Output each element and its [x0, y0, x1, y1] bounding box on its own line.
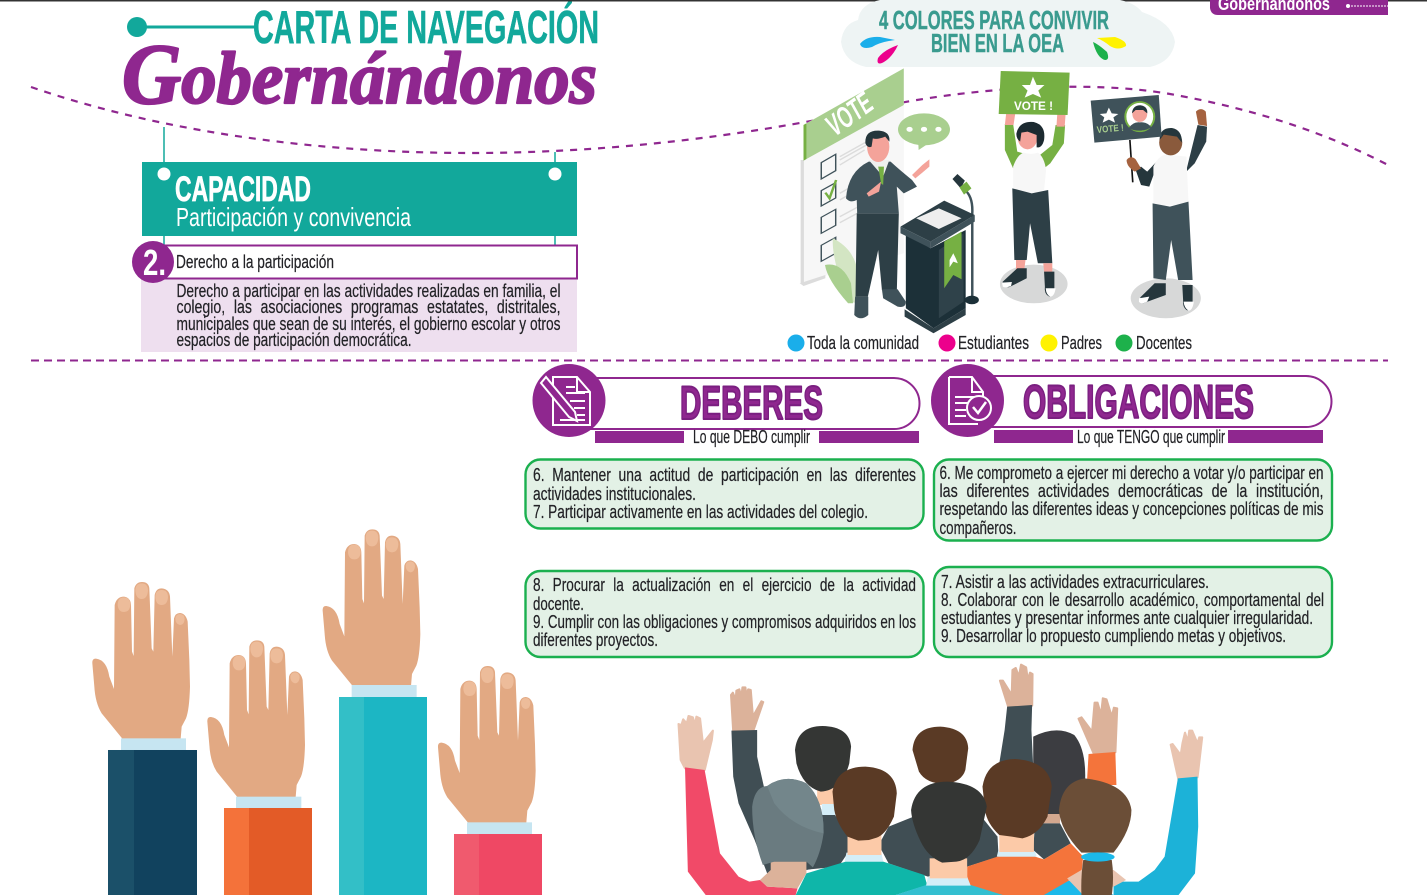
text box: deberes 8-9: 8. Procurar la actualización en el ejercicio de la actividad — [533, 575, 916, 595]
hand: navy sleeve — [92, 582, 197, 895]
title: Gobernándonos — [122, 26, 597, 122]
icon: document and pencil — [541, 377, 590, 425]
header: obligaciones: Lo que TENGO que cumplir — [1077, 427, 1225, 447]
text box: obligaciones 6: compañeros. — [940, 518, 1016, 538]
text box: deberes 6-7: 6. Mantener una actitud de participación en las diferentes — [533, 465, 916, 485]
text box: obligaciones 7-9: 7. Asistir a las actividades extracurriculares. — [941, 572, 1209, 592]
text box: deberes 6-7 — [526, 460, 924, 528]
panel: derecho a la participación: 2. — [143, 242, 166, 283]
icon: document and check — [949, 377, 991, 424]
legend — [788, 333, 1192, 353]
text box: obligaciones 6 — [934, 460, 1332, 540]
header: obligaciones: OBLIGACIONES — [1023, 375, 1254, 428]
legend: Docentes — [1136, 333, 1192, 353]
illustration: student with sign — [999, 71, 1070, 303]
text box: deberes 6-7: actividades institucionales. — [533, 484, 696, 504]
panel: capacidad: Participación y convivencia — [176, 202, 411, 232]
cloud heading: 4 colores: 4 COLORES PARA CONVIVIR — [879, 5, 1109, 35]
illustration: student with sign: VOTE ! — [1014, 99, 1053, 113]
text box: deberes 8-9: docente. — [533, 594, 584, 614]
cloud heading: 4 colores — [841, 0, 1175, 67]
illustration: raised hands — [92, 529, 542, 895]
panel: derecho a la participación: colegio, las asociaciones programas estatates, distritales, — [176, 297, 560, 317]
text box: obligaciones 6: las diferentes actividades democráticas de la institución, — [940, 481, 1324, 501]
text box: deberes 6-7: 7. Participar activamente en las actividades del colegio. — [533, 502, 868, 522]
header: obligaciones — [931, 364, 1332, 447]
illustration: candidate at podium — [799, 68, 979, 333]
illustration: crowd from behind — [679, 665, 1202, 895]
legend: Toda la comunidad — [807, 333, 919, 353]
illustration: candidate at podium: VOTE — [820, 86, 880, 143]
cloud heading: 4 colores: BIEN EN LA OEA — [931, 28, 1064, 58]
title: CARTA DE NAVEGACIÓN — [253, 1, 599, 53]
legend: Estudiantes — [958, 333, 1029, 353]
panel: derecho a la participación: espacios de participación democrática. — [176, 330, 412, 350]
hand: teal sleeve — [323, 529, 427, 895]
text box: deberes 8-9 — [526, 571, 924, 657]
hand: red sleeve — [438, 666, 542, 895]
panel: capacidad — [142, 127, 577, 246]
header: deberes — [532, 364, 920, 447]
panel: capacidad: CAPACIDAD — [175, 170, 311, 209]
hand: orange sleeve — [207, 640, 312, 895]
panel: derecho a la participación — [132, 241, 577, 352]
illustration: teacher with sign — [1091, 95, 1207, 318]
text box: obligaciones 7-9: 9. Desarrollar lo propuesto cumpliendo metas y objetivos. — [941, 626, 1286, 646]
panel: derecho a la participación: Derecho a la participación — [176, 252, 334, 272]
illustration: teacher with sign: VOTE ! — [1096, 123, 1124, 136]
text box: obligaciones 7-9: estudiantes y presentar informes ante cualquier irregularidad. — [941, 608, 1313, 628]
text box: obligaciones 7-9 — [934, 567, 1332, 657]
text box: deberes 8-9: 9. Cumplir con las obligaciones y compromisos adquiridos en los — [533, 612, 916, 632]
panel: derecho a la participación: Derecho a participar en las actividades realizadas en familia, el — [176, 281, 560, 301]
header: deberes: Lo que DEBO cumplir — [693, 427, 810, 447]
panel: derecho a la participación: municipales que sean de su interés, el gobierno escolar y otros — [176, 314, 560, 334]
legend: Padres — [1061, 333, 1102, 353]
text box: deberes 8-9: diferentes proyectos. — [533, 630, 658, 650]
header: deberes: DEBERES — [680, 376, 823, 429]
